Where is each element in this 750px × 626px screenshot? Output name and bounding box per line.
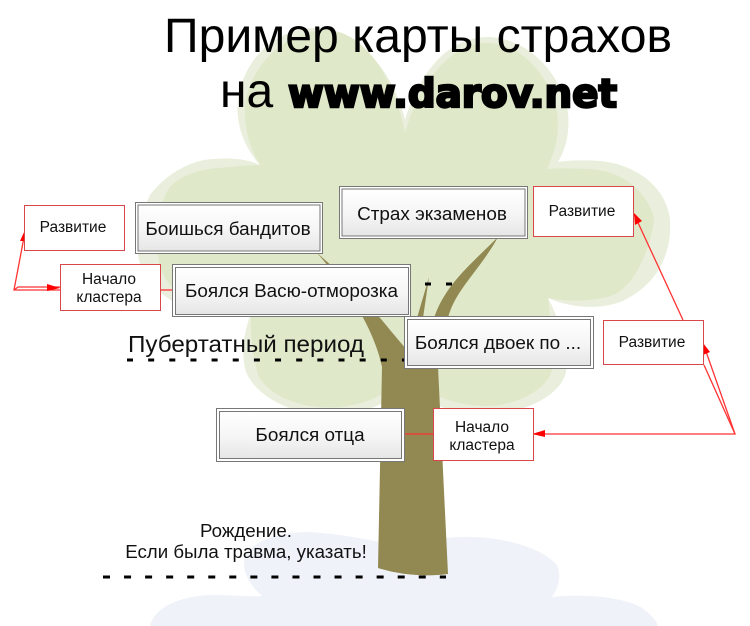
note: development right [604,320,704,364]
site name: www.darov.net [288,72,617,117]
note: cluster start center: Начало [455,419,509,436]
box: afraid of bandits: Боишься бандитов [145,219,311,240]
note: development right: Развитие [619,334,685,351]
timeline dashes: birth [103,576,446,578]
label: birth [125,520,367,562]
box: exam fear: Страх экзаменов [357,204,507,225]
red connectors right [403,213,735,437]
title: Пример карты страхов [164,10,672,63]
note: development top left [24,206,124,250]
timeline dashes: upper [173,282,452,286]
label: puberty: Пубертатный период [128,331,365,357]
tree crown [137,28,670,415]
box: exam fear [340,186,528,238]
note: development upper right: Развитие [549,203,615,220]
box: afraid of bad grades: Боялся двоек по ... [415,333,581,354]
label: birth: Если была травма, указать! [125,541,367,562]
note: development upper right [534,186,634,236]
note: development top left: Развитие [40,219,106,236]
box: afraid of Vasya: Боялся Васю-отморозка [185,281,398,302]
snow ground [150,532,658,626]
box: afraid of bandits [136,202,322,254]
note: cluster start center [434,408,534,460]
note: cluster start left: Начало [82,271,136,288]
label: birth: Рождение. [200,520,292,541]
tree trunk and branches [316,237,498,575]
box: afraid of father: Боялся отца [255,425,365,446]
note: cluster start left: кластера [76,289,142,306]
note: cluster start center: кластера [449,437,515,454]
title [164,10,672,118]
note: cluster start left [60,264,160,310]
red connectors left [14,230,176,291]
timeline dashes: puberty [127,358,408,362]
box: afraid of Vasya [172,264,410,316]
title: на [220,65,274,118]
box: afraid of father [216,408,404,462]
box: afraid of bad grades [404,316,594,368]
